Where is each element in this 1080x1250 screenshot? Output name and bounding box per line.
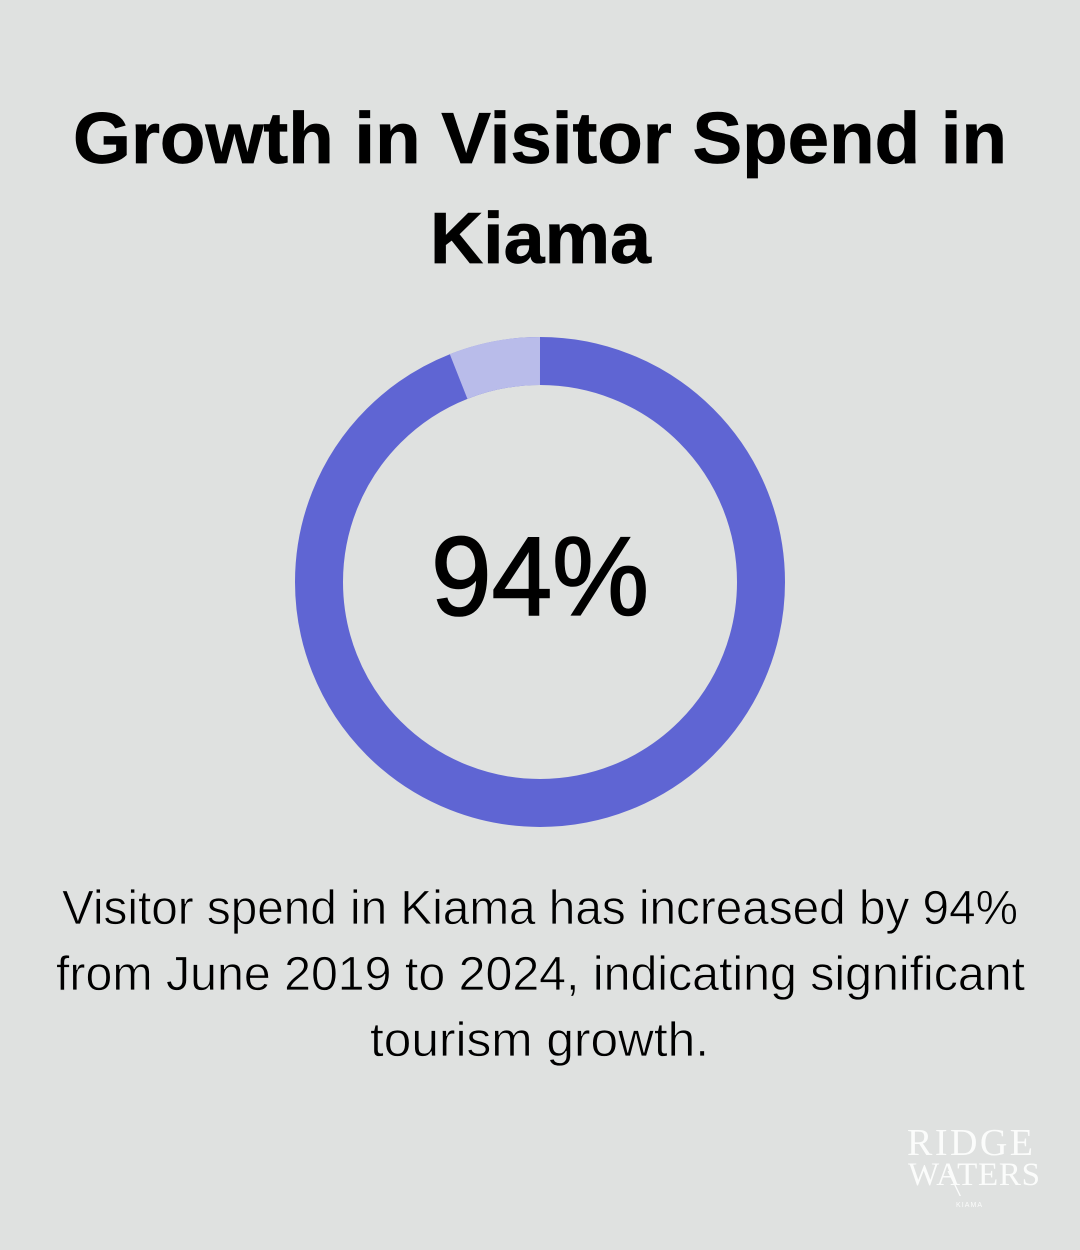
logo: Ridge Waters Kiama: KIAMA bbox=[956, 1202, 982, 1209]
donut track: full ring segment bbox=[319, 361, 761, 803]
title: Kiama bbox=[430, 199, 652, 279]
donut remainder segment: 6% bbox=[459, 361, 540, 376]
description text: Visitor spend in Kiama has increased by 94% bbox=[62, 882, 1018, 935]
donut centre value: 94% bbox=[431, 514, 649, 639]
logo: Ridge Waters Kiama: WATERS bbox=[908, 1157, 1040, 1193]
logo: Ridge Waters Kiama bbox=[907, 1122, 1040, 1209]
description text bbox=[56, 882, 1025, 1067]
title bbox=[73, 99, 1007, 279]
description text: tourism growth. bbox=[370, 1014, 709, 1067]
title: Growth in Visitor Spend in bbox=[73, 99, 1007, 179]
description text: from June 2019 to 2024, indicating significant bbox=[56, 948, 1025, 1001]
logo: Ridge Waters Kiama: RIDGE bbox=[907, 1122, 1033, 1164]
donut chart: 94% bbox=[319, 361, 761, 803]
